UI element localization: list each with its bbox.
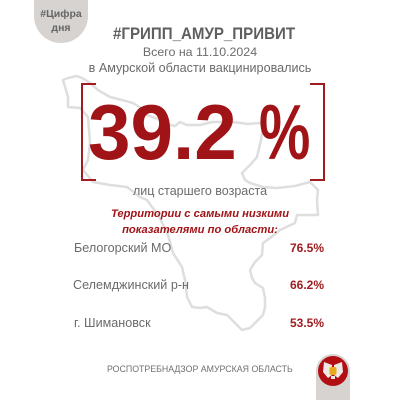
row value: 66.2%: 66.2% (290, 278, 324, 292)
badge text line 2: дня (51, 22, 71, 34)
digits 39.2: 39.2 (88, 88, 237, 176)
subtitle line 2: в Амурской области вакцинировались (89, 61, 311, 75)
row label: Селемджинский р-н: Селемджинский р-н (73, 278, 189, 292)
territories heading: показателями по области: (122, 224, 278, 236)
right bracket (310, 83, 325, 181)
footer text: РОСПОТРЕБНАДЗОР АМУРСКАЯ ОБЛАСТЬ (107, 364, 293, 374)
caption: лиц старшего возраста (133, 184, 267, 198)
row value: 53.5%: 53.5% (290, 316, 324, 330)
badge text line 1: #Цифра (40, 8, 82, 20)
badge: #Цифра дня (34, 0, 88, 43)
territories heading (111, 208, 289, 236)
percent sign: % (259, 88, 310, 176)
left bracket (81, 83, 96, 181)
row label: г. Шимановск: г. Шимановск (74, 316, 151, 330)
subtitle line 1: Всего на 11.10.2024 (143, 45, 257, 59)
territories heading: Территории с самыми низкими (111, 208, 289, 220)
title: #ГРИПП_АМУР_ПРИВИТ (113, 24, 295, 43)
big number (88, 88, 310, 176)
emblem tab (316, 354, 350, 400)
row label: Белогорский МО: Белогорский МО (74, 241, 171, 255)
row value: 76.5%: 76.5% (290, 241, 324, 255)
